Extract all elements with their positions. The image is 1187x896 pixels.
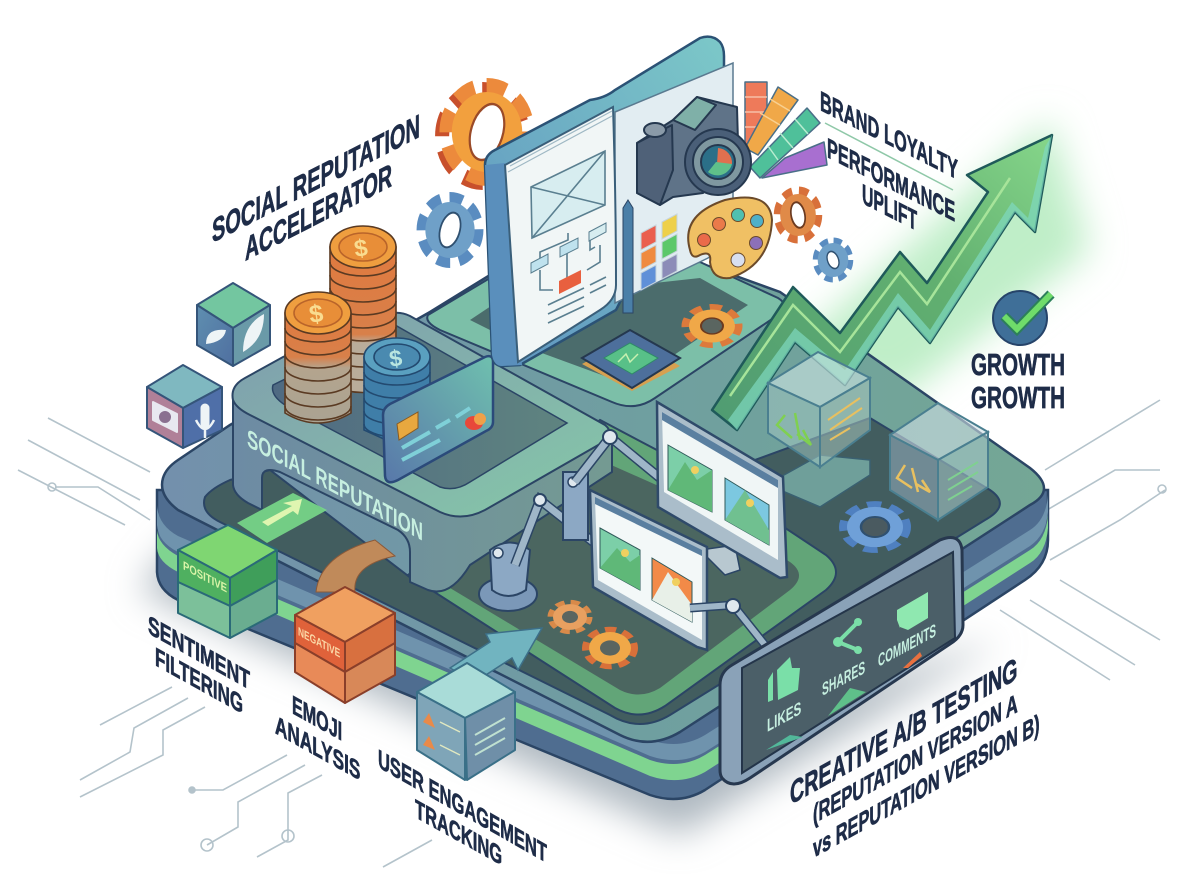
green mid plate (408, 420, 836, 715)
circuit lines background (18, 400, 1166, 867)
growth labels: GROWTH (971, 380, 1065, 415)
coin stack: front orange (285, 292, 351, 423)
robot arm upper (563, 430, 660, 540)
block recess (272, 325, 567, 489)
base top surface (162, 262, 1044, 742)
recess (204, 418, 1000, 724)
brand labels: PERFORMANCE (827, 132, 955, 228)
icon cube: camera and mic (147, 365, 222, 448)
creative testing label (790, 650, 1040, 864)
metrics panel (720, 538, 963, 784)
robot arm base (479, 494, 597, 611)
cube: positive (178, 525, 277, 638)
title (212, 106, 420, 268)
brand labels (820, 85, 958, 237)
creative testing label: (REPUTATION VERSION A (813, 688, 1018, 830)
gear: blue left (422, 198, 478, 262)
book (485, 37, 733, 366)
right page (615, 63, 733, 303)
base side layers (157, 490, 1048, 799)
book cover (485, 37, 724, 366)
arrow: engagement (450, 628, 542, 682)
icon cube: feather (197, 283, 270, 366)
title: SOCIAL REPUTATION (212, 106, 420, 250)
gear: small orange (778, 191, 818, 239)
coin stack: tall back orange (330, 226, 396, 392)
block label: SOCIAL REPUTATION (247, 424, 423, 547)
credit card (383, 356, 493, 482)
block top (232, 313, 609, 517)
positive label: POSITIVE (183, 558, 227, 596)
icon: check badge (993, 291, 1051, 345)
creative testing label: CREATIVE A/B TESTING (790, 650, 1018, 812)
comments label: COMMENTS (878, 620, 936, 671)
block side (233, 395, 612, 592)
arrow glow (780, 120, 1090, 400)
icon: share (833, 618, 862, 654)
shares label: SHARES (822, 657, 865, 700)
growth labels (971, 347, 1065, 415)
gear: plate orange (686, 307, 738, 345)
brand labels: BRAND LOYALTY (820, 85, 958, 186)
code cube 2 (890, 403, 988, 520)
gear: flat orange (586, 630, 634, 666)
monitor back (657, 402, 787, 578)
growth labels: GROWTH (971, 347, 1065, 382)
dollar sign: $ (307, 299, 325, 329)
likes label: LIKES (767, 697, 801, 736)
title: ACCELERATOR (245, 155, 392, 268)
paint palette (688, 198, 772, 278)
gear: flat orange small (551, 603, 589, 631)
dollar sign: $ (387, 344, 404, 372)
colour fan (745, 82, 827, 178)
arrow into tunnel: positive (237, 493, 327, 543)
ground shadow (140, 540, 1000, 835)
gear: small blue (816, 241, 850, 279)
pencil (623, 200, 633, 313)
coin stack: blue (364, 338, 430, 445)
sentiment label: SENTIMENT (148, 609, 250, 696)
gear: big orange (442, 86, 527, 182)
icon: thumbs up (768, 657, 800, 702)
big growth arrow (712, 135, 1052, 430)
trend markers (766, 735, 803, 750)
creative testing label: vs REPUTATION VERSION B) (813, 708, 1040, 864)
engagement label (378, 743, 547, 871)
emoji label (275, 689, 360, 787)
wireframe sketch (531, 151, 606, 323)
rear plate (427, 262, 784, 406)
engagement label: TRACKING (415, 793, 502, 871)
negative label: NEGATIVE (298, 624, 340, 661)
flowchart blocks (531, 254, 548, 273)
platform base (157, 262, 1048, 799)
microchip (582, 330, 680, 391)
emoji label: EMOJI (292, 689, 342, 747)
dollar sign: $ (352, 234, 370, 263)
camera (637, 97, 751, 205)
cube: negative (295, 587, 395, 703)
emoji label: ANALYSIS (275, 709, 360, 787)
monitor front (590, 490, 707, 650)
sentiment label: FILTERING (155, 641, 243, 720)
brand labels: UPLIFT (862, 178, 917, 237)
left page (505, 107, 616, 362)
social reputation block (232, 313, 612, 592)
colour swatches (641, 214, 677, 290)
robot arm right (690, 599, 765, 645)
arrow: negative curve (316, 540, 395, 592)
icon: comment bubble (897, 592, 928, 630)
cube: engagement (417, 663, 515, 780)
code cube 1 (768, 352, 870, 507)
book spine (485, 163, 522, 366)
gear: flat blue (844, 505, 906, 549)
